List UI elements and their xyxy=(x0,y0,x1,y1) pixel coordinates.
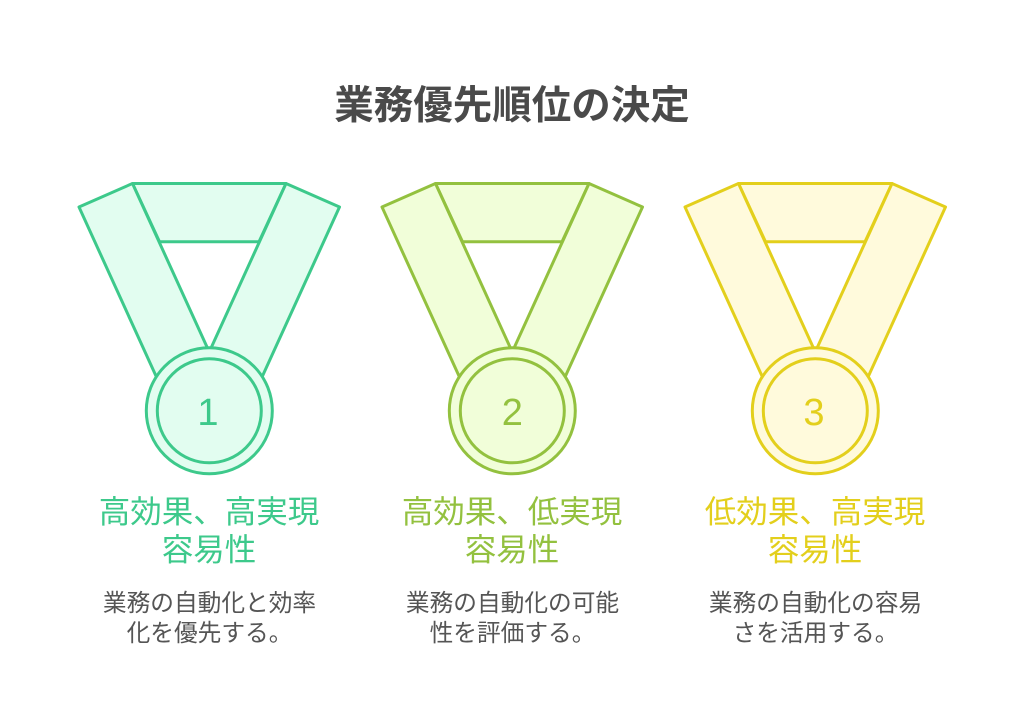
heading: priority 2: 容易性 xyxy=(465,532,559,568)
panel: priority 2 xyxy=(382,184,642,647)
title: 業務優先順位の決定 xyxy=(334,84,690,128)
description: priority 1: 業務の自動化と効率 xyxy=(103,590,316,617)
icon: medal 2: 2 xyxy=(502,392,523,434)
icon: medal 2 xyxy=(382,184,642,474)
heading: priority 1: 高効果、高実現 xyxy=(99,494,319,530)
icon: medal 3 xyxy=(685,184,946,474)
description: priority 3: さを活用する。 xyxy=(733,620,898,647)
heading: priority 3: 容易性 xyxy=(768,532,862,568)
heading: priority 3: 低効果、高実現 xyxy=(705,494,925,530)
description: priority 1: 化を優先する。 xyxy=(127,620,292,647)
heading: priority 1: 容易性 xyxy=(162,532,256,568)
panel: priority 1 xyxy=(79,184,340,647)
heading: priority 2: 高効果、低実現 xyxy=(402,494,622,530)
icon: medal 1: 1 xyxy=(197,392,219,434)
icon: medal 3: 3 xyxy=(803,392,825,434)
description: priority 2: 性を評価する。 xyxy=(430,620,595,647)
icon: medal 1 xyxy=(79,184,340,474)
panel: priority 3 xyxy=(685,184,946,647)
description: priority 3: 業務の自動化の容易 xyxy=(709,590,922,617)
description: priority 2: 業務の自動化の可能 xyxy=(406,590,619,617)
